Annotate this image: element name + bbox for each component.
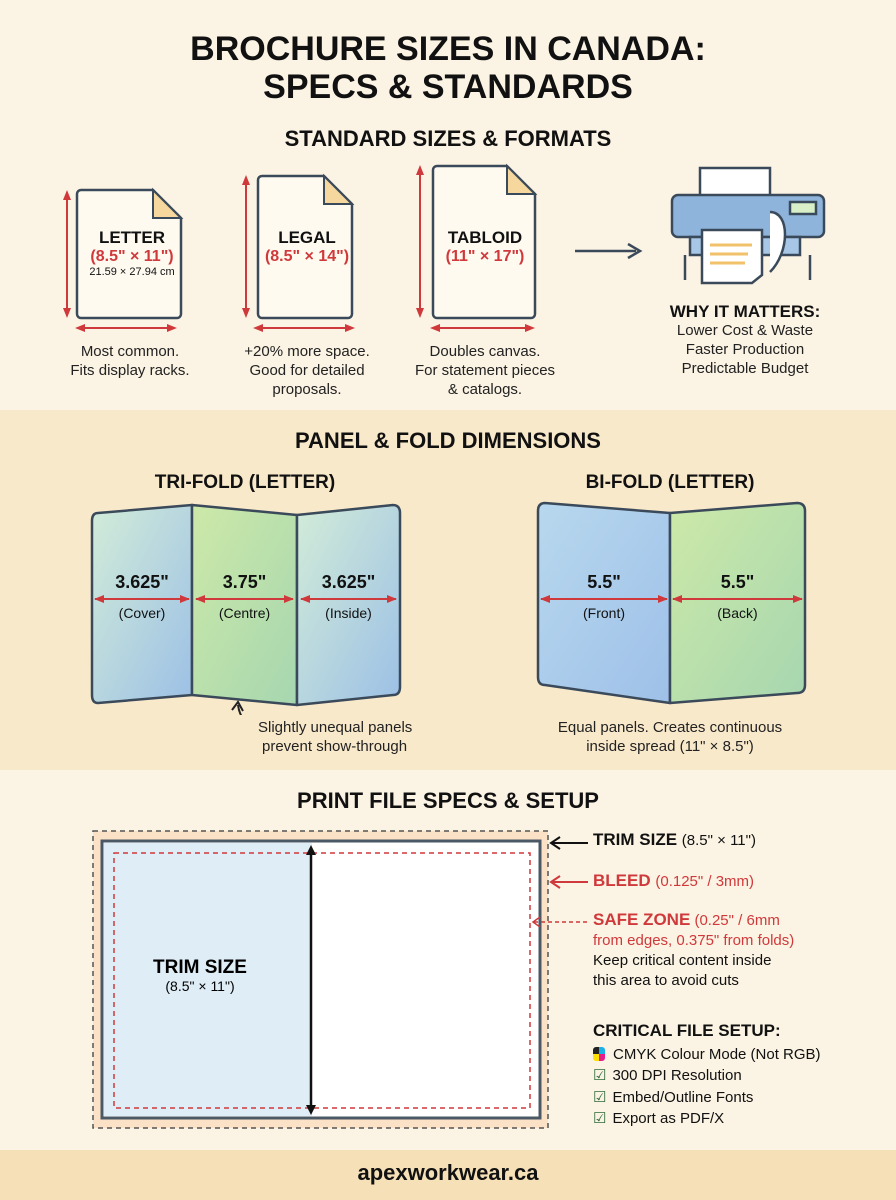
letter [67, 190, 181, 328]
tabloid label [446, 228, 524, 265]
arrow to printer [575, 250, 636, 252]
tabloid desc [415, 343, 555, 398]
print layout diagram: (8.5" × 11") [165, 978, 235, 994]
title: BROCHURE SIZES IN CANADA: [190, 30, 706, 68]
tri-fold labels [115, 572, 169, 621]
why it matters: WHY IT MATTERS: [670, 302, 820, 321]
tabloid desc: For statement pieces [415, 362, 555, 379]
bi-fold labels [583, 572, 625, 621]
legal [246, 176, 352, 328]
safe zone label: from edges, 0.375" from folds) [593, 932, 794, 949]
bi-fold note: Equal panels. Creates continuous [558, 719, 782, 736]
letter label: 21.59 × 27.94 cm [89, 266, 175, 278]
legal desc [244, 343, 370, 398]
text: (Inside) [325, 605, 372, 621]
safe zone label: Keep critical content inside [593, 952, 771, 969]
bifold [538, 503, 805, 703]
letter desc: Most common. [81, 343, 179, 360]
critical file setup checklist: ☑ Export as PDF/X [593, 1110, 724, 1127]
letter desc [70, 343, 190, 379]
legal label: LEGAL [278, 228, 336, 247]
legal desc: proposals. [272, 381, 342, 398]
safe zone label: SAFE ZONE (0.25" / 6mm [593, 910, 780, 929]
pointer arrows [532, 836, 588, 928]
tabloid desc: Doubles canvas. [430, 343, 540, 360]
legal label: (8.5" × 14") [265, 248, 349, 265]
why it matters: Lower Cost & Waste [677, 322, 813, 339]
title [190, 30, 706, 106]
text: (Centre) [219, 605, 270, 621]
critical file setup checklist: ☑ Embed/Outline Fonts [593, 1088, 753, 1106]
legal desc: +20% more space. [244, 343, 370, 360]
tri-fold labels: 3.625" [115, 572, 169, 592]
letter label: LETTER [99, 228, 165, 247]
legal desc: Good for detailed [249, 362, 365, 379]
letter desc: Fits display racks. [70, 362, 190, 379]
tri-fold note [258, 719, 412, 755]
safe zone label [593, 910, 794, 989]
print layout diagram: TRIM SIZE [153, 957, 247, 978]
critical file setup checklist: CMYK Colour Mode (Not RGB) [613, 1046, 821, 1062]
title: SPECS & STANDARDS [263, 68, 633, 106]
heading: print file specs: PRINT FILE SPECS & SETUP [297, 788, 599, 813]
trim size label: TRIM SIZE (8.5" × 11") [593, 830, 756, 849]
heading: standard sizes: STANDARD SIZES & FORMATS [285, 126, 611, 151]
critical file setup checklist: CRITICAL FILE SETUP: [593, 1021, 781, 1040]
letter label [89, 228, 175, 278]
tabloid desc: & catalogs. [448, 381, 522, 398]
paper size icons [63, 164, 826, 332]
tri-fold heading: TRI-FOLD (LETTER) [155, 472, 335, 493]
why it matters: Faster Production [686, 341, 804, 358]
fold diagrams [90, 502, 806, 715]
text: 3.625" [322, 572, 375, 592]
print layout diagram [92, 830, 549, 1129]
heading: panel & fold: PANEL & FOLD DIMENSIONS [295, 428, 601, 453]
footer: apexworkwear.ca [357, 1160, 538, 1185]
bi-fold note [558, 719, 782, 755]
why it matters: Predictable Budget [682, 360, 808, 377]
tabloid label: TABLOID [448, 228, 522, 247]
bi-fold labels: 5.5" [587, 572, 621, 592]
critical file setup checklist: ☑ 300 DPI Resolution [593, 1067, 742, 1084]
critical file setup checklist [593, 1021, 821, 1127]
printer [672, 168, 824, 283]
curved note arrow [238, 705, 252, 727]
text: (Back) [717, 605, 758, 621]
text: 5.5" [721, 572, 754, 592]
safe zone label: this area to avoid cuts [593, 972, 739, 989]
bi-fold note: inside spread (11" × 8.5") [586, 738, 754, 755]
text: 3.75" [223, 572, 266, 592]
tri-fold note: prevent show-through [262, 738, 407, 755]
bi-fold heading: BI-FOLD (LETTER) [586, 472, 754, 493]
bi-fold labels: (Front) [583, 605, 625, 621]
tabloid [420, 166, 535, 328]
why it matters [670, 302, 820, 377]
tabloid label: (11" × 17") [446, 248, 524, 265]
bleed label: BLEED (0.125" / 3mm) [593, 871, 754, 890]
tri-fold labels: (Cover) [119, 605, 165, 621]
legal label [265, 228, 349, 265]
trifold [92, 505, 400, 705]
letter label: (8.5" × 11") [90, 248, 174, 265]
tri-fold note: Slightly unequal panels [258, 719, 412, 736]
